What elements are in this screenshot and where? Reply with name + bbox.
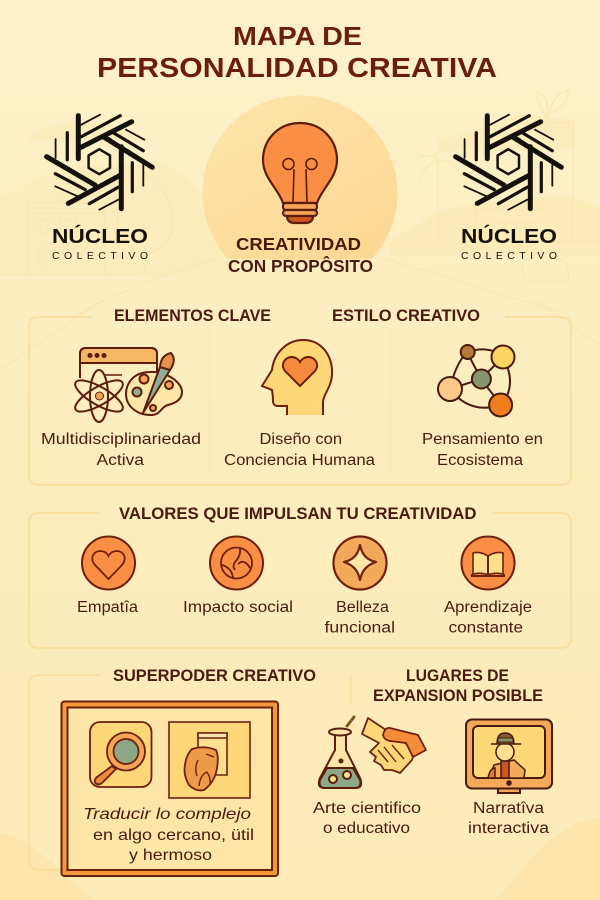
panel: valores [29, 505, 571, 648]
icon: handshake [362, 718, 426, 773]
label: aprendizaje constante: constante [448, 620, 523, 636]
icon: monitor with character [466, 720, 552, 793]
label: impacto social: Impacto social [183, 599, 293, 616]
label: multidisciplinariedad activa [41, 431, 201, 469]
superpower text: y hermoso [129, 847, 212, 864]
logo: Núcleo Colectivo left: NÚCLEO [52, 224, 148, 248]
logo: Núcleo Colectivo right: COLECTIVO [461, 250, 557, 262]
logo mark [47, 115, 152, 210]
label: arte científico: Arte cientifico [313, 800, 421, 817]
panel: elementos clave / estilo creativo [29, 307, 571, 485]
panel: lugares de expansión posible [313, 667, 552, 837]
label: belleza funcional: Belleza [336, 599, 389, 616]
label: pensamiento en ecosistema: Ecosistema [437, 452, 523, 469]
icon: magnifier [90, 722, 152, 787]
logo: Núcleo Colectivo left [47, 115, 152, 262]
label: aprendizaje constante: Aprendizaje [444, 599, 532, 616]
label: narrativa interactiva [468, 800, 549, 837]
title: PERSONALIDAD CREATIVA [97, 52, 497, 83]
label: multidisciplinariedad activa: Multidisciplinariedad [41, 431, 201, 448]
label: empatía: Empatîa [77, 599, 138, 616]
icon: head with heart [262, 340, 332, 415]
title: MAPA DE [233, 21, 362, 51]
heading: lugares: LUGARES DE [406, 667, 509, 685]
label: pensamiento en ecosistema [422, 431, 543, 469]
superpower text: Traducir lo complejo [83, 806, 251, 823]
icon: ecosystem network [438, 345, 514, 416]
logo: Núcleo Colectivo left: COLECTIVO [52, 250, 148, 262]
logo: Núcleo Colectivo right: NÚCLEO [461, 224, 557, 248]
superpower text: en algo cercano, ütil [93, 827, 254, 844]
label: diseño con conciencia humana [224, 431, 375, 469]
icon: globe badge [210, 536, 263, 590]
central label: CREATIVIDAD [236, 234, 361, 254]
central label [228, 234, 373, 276]
heading: superpoder creativo: SUPERPODER CREATIVO [113, 667, 316, 685]
label: diseño con conciencia humana: Conciencia Humana [224, 452, 375, 469]
superpower frame [62, 702, 278, 876]
panel: superpoder creativo [29, 667, 316, 876]
icon: light bulb [263, 123, 337, 223]
central circle [202, 96, 398, 260]
heading: valores: VALORES QUE IMPULSAN TU CREATIVIDAD [119, 505, 477, 523]
icon: window, atom and palette [71, 348, 182, 422]
label: pensamiento en ecosistema: Pensamiento en [422, 431, 543, 448]
label: arte científico [313, 800, 421, 837]
icon: flask [319, 717, 361, 788]
title [97, 21, 497, 83]
icon: book badge [462, 536, 514, 590]
heading: lugares [373, 667, 543, 705]
label: diseño con conciencia humana: Diseño con [260, 431, 342, 448]
label: arte científico: o educativo [323, 820, 410, 837]
superpower text [83, 806, 254, 864]
label: belleza funcional [324, 599, 395, 636]
label: narrativa interactiva: Narratîva [473, 800, 544, 817]
heading: lugares: EXPANSION POSIBLE [373, 687, 543, 705]
label: belleza funcional: funcional [324, 620, 395, 636]
heading: elementos clave: ELEMENTOS CLAVE [114, 307, 271, 325]
logo: Núcleo Colectivo right [456, 115, 561, 262]
icon: star badge [334, 536, 386, 590]
label: multidisciplinariedad activa: Activa [96, 452, 144, 469]
icon: specimen card [169, 722, 250, 798]
label: aprendizaje constante [444, 599, 532, 636]
label: narrativa interactiva: interactiva [468, 820, 549, 837]
heading: estilo creativo: ESTILO CREATIVO [332, 307, 480, 325]
central label: CON PROPÔSITO [228, 255, 373, 276]
icon: heart badge [82, 536, 135, 590]
